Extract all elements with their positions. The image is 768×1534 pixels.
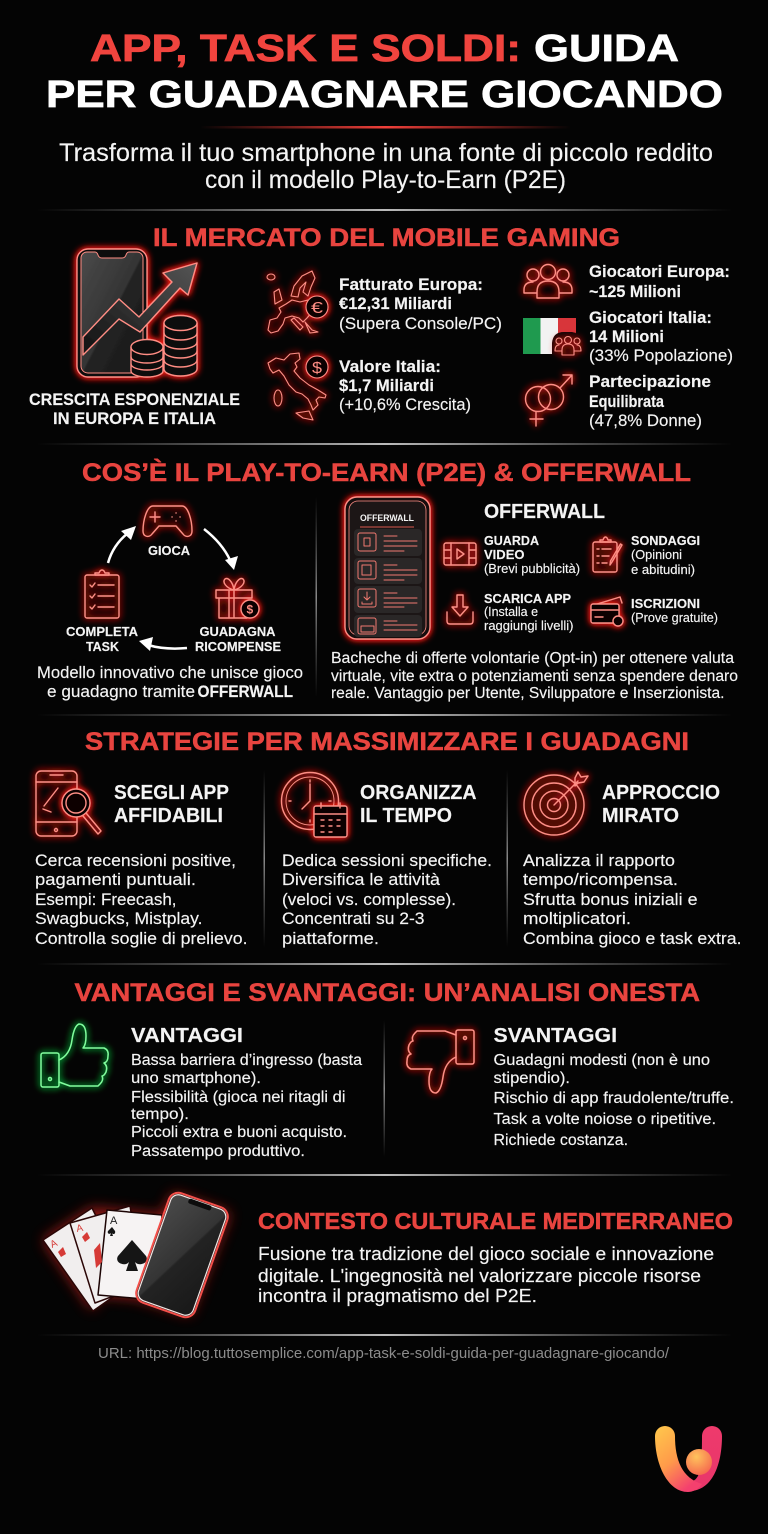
heading: p2e: COS’È IL PLAY-TO-EARN (P2E) & OFFERWALL: [82, 458, 691, 487]
text: fatturato europa: Fatturato Europa:: [339, 275, 483, 294]
text: organizza body: Diversifica le attività: [282, 870, 441, 889]
text: fusione: digitale. L'ingegnosità nel valorizzare piccole risorse: [258, 1266, 701, 1286]
icon: europe map with euro: [267, 271, 328, 333]
text: scarica app: [484, 591, 574, 633]
text: fusione: [258, 1244, 714, 1306]
panel: strategie: [35, 728, 742, 948]
text: valore italia: $1,7 Miliardi: [339, 376, 434, 395]
text: sondaggi: (Opinioni: [631, 548, 682, 562]
card ace letter, second card: A: [75, 1223, 84, 1235]
heading: strategie: STRATEGIE PER MASSIMIZZARE I GUADAGNI: [85, 728, 689, 756]
text: scegli app: [114, 782, 229, 827]
text: giocatori europa: [589, 262, 730, 301]
icon: people group: [524, 264, 572, 298]
text: modello: [37, 664, 303, 701]
panel: mercato: [29, 224, 733, 430]
caption: crescita: CRESCITA ESPONENZIALE: [29, 390, 240, 409]
text: guarda video: [484, 533, 580, 576]
text: iscrizioni: [631, 596, 718, 625]
text: fusione: incontra il pragmatismo del P2E.: [258, 1286, 537, 1306]
title: PER GUADAGNARE GIOCANDO: [46, 74, 723, 116]
heading: offerwall: OFFERWALL: [484, 501, 605, 523]
text: vantaggi: uno smartphone).: [131, 1070, 261, 1087]
dollar sign: $: [246, 602, 254, 616]
label: guadagna ricompense: RICOMPENSE: [195, 639, 281, 654]
arrow: gioca to guadagna: [204, 529, 238, 570]
text: giocatori italia: Giocatori Italia:: [589, 308, 712, 327]
text: svantaggi: SVANTAGGI: [494, 1025, 617, 1047]
panel: vantaggi e svantaggi: [41, 979, 734, 1160]
title: [46, 28, 723, 116]
text: fatturato europa: [339, 275, 502, 333]
icon: phone with magnifier: [36, 771, 101, 836]
icon: italy map with dollar: [268, 353, 328, 420]
text: approccio body: Sfrutta bonus iniziali e: [523, 890, 698, 909]
illustration: cards and phone: [43, 1190, 231, 1320]
text: guarda video: VIDEO: [484, 547, 524, 562]
text: scegli app: AFFIDABILI: [114, 805, 223, 827]
text: bacheche: virtuale, vite extra o potenziamenti senza spendere denaro: [331, 668, 738, 685]
label: completa task: COMPLETA: [66, 624, 139, 639]
text: organizza body: (veloci vs. complesse).: [282, 890, 456, 909]
text: organizza: IL TEMPO: [360, 805, 452, 827]
euro sign: €: [311, 300, 323, 317]
text: organizza: [360, 782, 476, 827]
label: completa task: TASK: [86, 639, 120, 654]
text: approccio body: Combina gioco e task extra.: [523, 929, 742, 948]
text: sondaggi: [631, 533, 700, 577]
text: scarica app: SCARICA APP: [484, 591, 571, 606]
text: approccio body: tempo/ricompensa.: [523, 870, 678, 889]
spade suit: [117, 1240, 147, 1271]
panel: contesto culturale: [43, 1190, 733, 1320]
text: fusione: Fusione tra tradizione del gioco sociale e innovazione: [258, 1244, 714, 1264]
text: approccio body: Analizza il rapporto: [523, 851, 675, 870]
text: bacheche: [331, 650, 738, 702]
text: giocatori italia: 14 Milioni: [589, 327, 664, 346]
icon: offerwall phone: [345, 497, 430, 639]
icon: thumb down: [407, 1030, 474, 1093]
text: svantaggi: Richiede costanza.: [494, 1132, 628, 1149]
heading: mercato: IL MERCATO DEL MOBILE GAMING: [153, 224, 620, 252]
text: partecipazione: Equilibrata: [589, 392, 664, 411]
text: giocatori europa: Giocatori Europa:: [589, 262, 730, 281]
phone label: OFFERWALL: [360, 513, 414, 524]
text: approccio: APPROCCIO: [602, 782, 720, 804]
subtitle: Trasforma il tuo smartphone in una fonte di piccolo reddito: [59, 139, 713, 167]
text: svantaggi: stipendio).: [494, 1070, 570, 1087]
icon: gender symbols: [526, 375, 572, 426]
card ace letter, third card: A: [110, 1215, 118, 1227]
text: scegli body: Esempi: Freecash,: [35, 890, 176, 909]
heading: vantaggi svantaggi: VANTAGGI E SVANTAGGI: UN’ANALISI ONESTA: [74, 979, 700, 1007]
text: organizza body: piattaforme.: [282, 929, 379, 948]
arrow: guadagna to completa: [139, 637, 187, 651]
text: vantaggi: [131, 1025, 362, 1160]
text: vantaggi: Passatempo produttivo.: [131, 1143, 305, 1160]
icon: phone with growth arrow and coins: [77, 249, 197, 377]
icon: survey clipboard: [593, 537, 622, 572]
text: approccio: [602, 782, 720, 827]
icon: clock with calendar: [282, 772, 347, 837]
subtitle: con il modello Play-to-Earn (P2E): [205, 166, 566, 194]
label: completa task: [66, 624, 139, 654]
icon: download: [447, 595, 473, 624]
subtitle: [59, 139, 713, 194]
text: scegli body: [35, 851, 248, 948]
text: iscrizioni: (Prove gratuite): [631, 611, 718, 625]
heading: contesto: CONTESTO CULTURALE MEDITERRANEO: [258, 1208, 733, 1234]
text: partecipazione: Partecipazione: [589, 372, 711, 391]
text: bacheche: reale. Vantaggio per Utente, Sviluppatore e Inserzionista.: [331, 685, 724, 702]
text: scegli body: Swagbucks, Mistplay.: [35, 909, 202, 928]
text: giocatori europa: ~125 Milioni: [589, 282, 681, 301]
text: svantaggi: Rischio di app fraudolente/truffe.: [494, 1090, 734, 1107]
text: giocatori italia: [589, 308, 733, 365]
text: svantaggi: [494, 1025, 734, 1149]
text: modello: e guadagno tramite: [47, 683, 195, 701]
text: organizza body: [282, 851, 492, 948]
source url: URL: https://blog.tuttosemplice.com/app-task-e-soldi-guida-per-guadagnare-giocando/: [98, 1345, 670, 1362]
text: vantaggi: VANTAGGI: [131, 1025, 243, 1047]
text: svantaggi: Task a volte noiose o ripetitive.: [494, 1111, 716, 1128]
title: APP, TASK E SOLDI:: [90, 28, 521, 70]
text: fatturato europa: €12,31 Miliardi: [339, 294, 452, 313]
text: iscrizioni: ISCRIZIONI: [631, 596, 700, 611]
text: scegli body: pagamenti puntuali.: [35, 870, 196, 889]
text: vantaggi: Piccoli extra e buoni acquisto.: [131, 1124, 347, 1141]
caption: crescita: [29, 390, 240, 428]
text: partecipazione: (47,8% Donne): [589, 411, 702, 430]
text: scegli body: Cerca recensioni positive,: [35, 851, 236, 870]
icon: gift with dollar: [216, 579, 259, 618]
text: vantaggi: Bassa barriera d’ingresso (basta: [131, 1052, 362, 1069]
text: valore italia: Valore Italia:: [339, 357, 441, 376]
text: sondaggi: SONDAGGI: [631, 533, 700, 548]
icon: credit cards: [591, 597, 623, 626]
text: scegli app: SCEGLI APP: [114, 782, 229, 804]
text: partecipazione: [589, 372, 711, 430]
arrow: completa to gioca: [108, 526, 136, 563]
icon: italian flag with people: [523, 318, 583, 358]
text: organizza body: Concentrati su 2-3: [282, 909, 424, 928]
text: fatturato europa: (Supera Console/PC): [339, 314, 502, 333]
icon: clipboard checklist: [85, 570, 119, 618]
text: valore italia: [339, 357, 471, 414]
text: guarda video: GUARDA: [484, 533, 540, 548]
text: approccio body: [523, 851, 742, 948]
text: modello: OFFERWALL: [198, 683, 293, 701]
text: bacheche: Bacheche di offerte volontarie (Opt-in) per ottenere valuta: [331, 650, 734, 667]
text: scarica app: raggiungi livelli): [484, 619, 574, 633]
text: sondaggi: e abitudini): [631, 563, 695, 577]
card ace letter, first card: A: [49, 1238, 60, 1251]
text: vantaggi: Flessibilità (gioca nei ritagli di: [131, 1089, 346, 1106]
text: organizza: ORGANIZZA: [360, 782, 476, 804]
text: vantaggi: tempo).: [131, 1106, 189, 1123]
text: valore italia: (+10,6% Crescita): [339, 395, 471, 414]
label: guadagna ricompense: [195, 624, 281, 654]
text: organizza body: Dedica sessioni specifiche.: [282, 851, 492, 870]
dollar sign: $: [312, 360, 322, 377]
panel: play-to-earn: [37, 458, 738, 702]
label: guadagna ricompense: GUADAGNA: [200, 624, 276, 639]
text: giocatori italia: (33% Popolazione): [589, 346, 733, 365]
text: scarica app: (Installa e: [484, 605, 538, 619]
text: guarda video: (Brevi pubblicità): [484, 562, 580, 576]
text: approccio: MIRATO: [602, 805, 679, 827]
icon: gamepad: [143, 506, 192, 536]
text: modello: Modello innovativo che unisce gioco: [37, 664, 303, 682]
text: scegli body: Controlla soglie di prelievo.: [35, 929, 248, 948]
text: approccio body: moltiplicatori.: [523, 909, 631, 928]
caption: crescita: IN EUROPA E ITALIA: [53, 409, 216, 428]
text: svantaggi: Guadagni modesti (non è uno: [494, 1052, 710, 1069]
icon: target with dart: [524, 772, 588, 835]
icon: video: [444, 543, 476, 565]
label: gioca: GIOCA: [148, 543, 191, 558]
logo: [655, 1426, 722, 1492]
title: GUIDA: [534, 28, 679, 70]
icon: thumb up: [41, 1024, 108, 1087]
